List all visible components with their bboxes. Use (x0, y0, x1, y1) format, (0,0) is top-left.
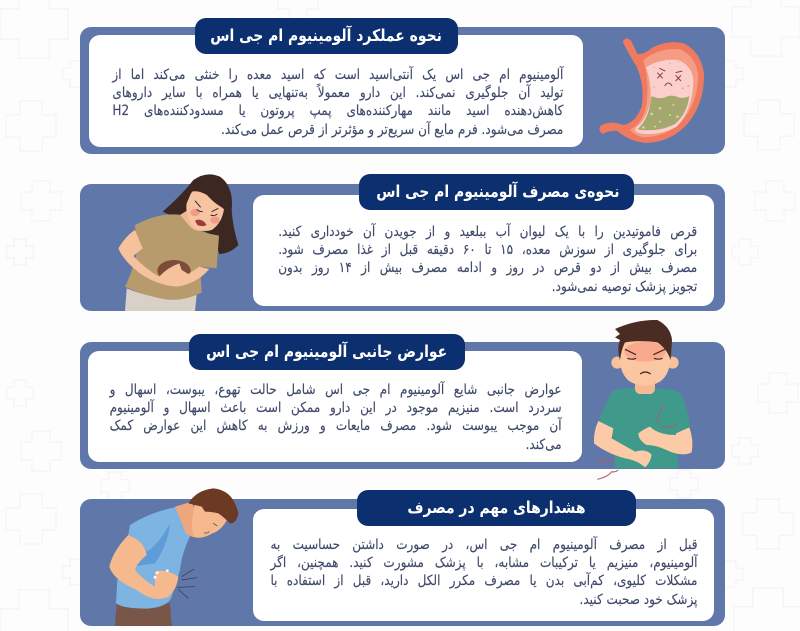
body text: side effects: سردرد است. منیزیم موجود در این دارو ممکن است باعث اسهال و آلومینیوم (110, 400, 562, 416)
body text: warnings: قبل از مصرف آلومینیوم ام جی اس، در صورت داشتن حساسیت به (270, 537, 697, 553)
illustration: man bent over in pain (109, 488, 238, 626)
body text: how to use (278, 223, 697, 295)
body text: how it works: کاهش‌دهنده اسید مانند مهارکننده‌های پمپ پروتون یا مسدودکننده‌های H2 (112, 103, 563, 119)
body text: how to use: قرص فاموتیدین را با یک لیوان آب ببلعید و از جویدن آن خودداری کنید. (278, 224, 697, 240)
body text: how it works: مصرف می‌شود. فرم مایع آن سریع‌تر و مؤثرتر از قرص عمل می‌کند. (221, 122, 563, 138)
body text: how it works: آلومینیوم ام جی اس یک آنتی‌اسید است که اسید معده را خنثی می‌کند اما از (112, 67, 563, 83)
body text: warnings: مشکلات کلیوی، کم‌آبی بدن یا مصرف مکرر الکل دارید، قبل از استفاده با (270, 573, 697, 589)
panel: warnings (80, 499, 725, 626)
text card (253, 509, 714, 621)
heading: how to use (359, 174, 634, 210)
panel: how it works (80, 27, 725, 154)
body text: warnings: آلومینیوم، منیزیم یا ترکیبات مشابه، با پزشک مشورت کنید. همچنین، اگر (270, 555, 697, 571)
icon: stomach illustration (599, 38, 704, 143)
text card (253, 195, 714, 306)
body text: side effects: می‌کند. (526, 437, 562, 453)
body text: side effects: آن موجب یبوست شود. مصرف مایعات و ورزش به کاهش این عوارض کمک (110, 418, 562, 434)
heading: warnings (357, 490, 636, 526)
heading: warnings: هشدارهای مهم در مصرف (407, 498, 586, 517)
body text: how to use: تجویز پزشک توصیه نمی‌شود. (552, 279, 697, 295)
body text: warnings (270, 536, 698, 608)
body text: warnings: پزشک خود صحبت کنید. (579, 592, 697, 608)
heading: side effects (189, 334, 465, 370)
text card (89, 35, 583, 147)
heading: how it works (195, 18, 458, 54)
text card (88, 351, 582, 462)
body text: side effects: عوارض جانبی شایع آلومینیوم ام جی اس شامل حالت تهوع، یبوست، اسهال و (110, 382, 562, 398)
body text: side effects (109, 381, 562, 453)
illustration: boy with stomach ache (594, 320, 692, 480)
illustration: woman holding stomach (118, 174, 238, 311)
body text: how it works (112, 66, 564, 138)
panel: side effects (80, 342, 725, 469)
heading: how it works: نحوه عملکرد آلومینیوم ام جی اس (210, 26, 442, 45)
body text: how to use: مصرف بیش از دو قرص در روز و ادامه مصرف بیش از ۱۴ روز بدون (278, 260, 697, 276)
heading: side effects: عوارض جانبی آلومینیوم ام جی اس (206, 342, 447, 361)
heading: how to use: نحوه‌ی مصرف آلومینیوم ام جی اس (377, 182, 620, 201)
body text: how to use: برای جلوگیری از سوزش معده، ۱۵ تا ۶۰ دقیقه قبل از غذا مصرف شود. (278, 242, 697, 258)
body text: how it works: تولید آن جلوگیری نمی‌کند. این دارو معمولاً به‌تنهایی یا همراه با سایر داروهای (112, 85, 563, 101)
panel: how to use (80, 184, 725, 311)
